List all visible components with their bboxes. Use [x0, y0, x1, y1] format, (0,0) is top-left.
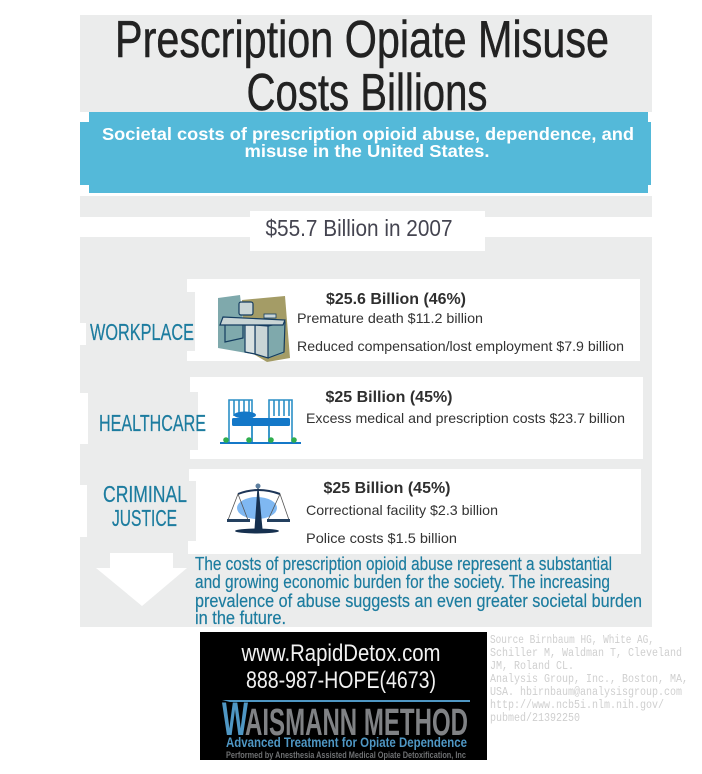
healthcare figures: $25 Billion (45%) — [326, 389, 452, 406]
conclusion text: The costs of prescription opioid abuse represent a substantial — [195, 554, 612, 574]
icon: scales of justice — [227, 484, 290, 534]
panel: main background — [80, 196, 652, 627]
panel: workplace — [80, 279, 640, 362]
source citation: JM, Roland CL. — [490, 660, 574, 673]
panel: contact and logo — [200, 632, 487, 761]
panel: title background — [80, 15, 652, 112]
contact details — [241, 640, 440, 694]
logo: Waisman Method: Performed by Anesthesia Assisted Medical Opiate Detoxification, Inc — [226, 750, 466, 761]
healthcare figures — [306, 389, 625, 426]
healthcare label: HEALTHCARE — [99, 410, 206, 436]
subtitle text — [102, 124, 634, 161]
icon: hospital bed — [220, 400, 301, 444]
subtitle text: Societal costs of prescription opioid abuse, dependence, and — [102, 124, 634, 144]
panel: criminal justice — [80, 469, 641, 554]
criminal justice figures: Police costs $1.5 billion — [306, 530, 457, 546]
workplace figures: $25.6 Billion (46%) — [326, 291, 466, 308]
logo: Waisman Method: W — [222, 692, 248, 745]
criminal justice figures: Correctional facility $2.3 billion — [306, 502, 498, 518]
source citation: pubmed/21392250 — [490, 712, 580, 725]
criminal justice figures — [306, 480, 498, 546]
logo: Waisman Method: Advanced Treatment for Opiate Dependence — [226, 735, 467, 750]
logo: Waisman Method: AISMANN METHOD — [245, 702, 468, 744]
icon: down arrow — [96, 553, 187, 606]
title — [115, 11, 609, 122]
workplace figures: Reduced compensation/lost employment $7.9 billion — [297, 338, 624, 354]
criminal justice label — [103, 481, 187, 531]
conclusion text: prevalence of abuse suggests an even greater societal burden — [195, 591, 642, 611]
workplace figures — [297, 291, 624, 354]
logo: Waisman Method — [222, 692, 470, 761]
source citation: http://www.ncb5i.nlm.nih.gov/ — [490, 699, 664, 712]
conclusion text — [195, 554, 642, 628]
total cost box: $55.7 Billion in 2007 — [266, 215, 452, 241]
contact details: 888-987-HOPE(4673) — [246, 667, 436, 694]
criminal justice label: JUSTICE — [112, 505, 177, 531]
panel: healthcare — [80, 377, 643, 459]
criminal justice label: CRIMINAL — [103, 481, 187, 507]
conclusion text: and growing economic burden for the society. The increasing — [195, 572, 610, 592]
icon: office desk — [218, 295, 290, 362]
source citation: Source Birnbaum HG, White AG, — [490, 634, 654, 647]
panel: subtitle banner — [80, 112, 651, 193]
criminal justice figures: $25 Billion (45%) — [324, 480, 450, 497]
workplace figures: Premature death $11.2 billion — [297, 310, 483, 326]
contact details: www.RapidDetox.com — [241, 640, 440, 667]
source citation — [490, 634, 688, 725]
total cost box — [250, 211, 485, 251]
conclusion text: in the future. — [195, 608, 286, 628]
workplace label: WORKPLACE — [90, 319, 194, 345]
title: Costs Billions — [246, 64, 488, 122]
subtitle text: misuse in the United States. — [244, 141, 490, 161]
healthcare figures: Excess medical and prescription costs $23.7 billion — [306, 410, 625, 426]
